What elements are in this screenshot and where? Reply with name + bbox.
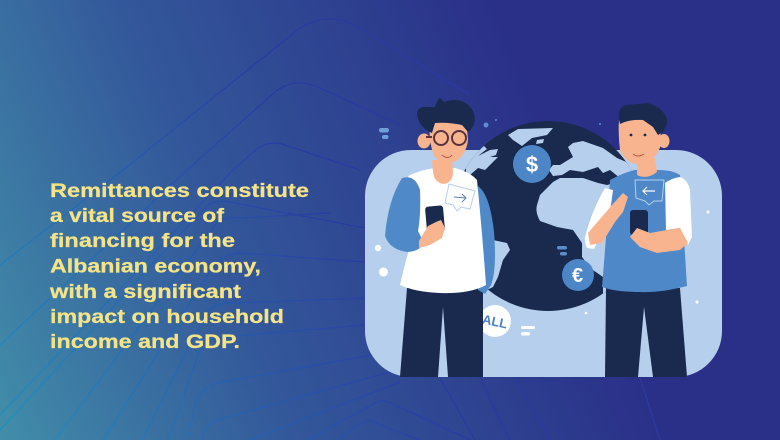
neck	[432, 160, 453, 184]
speech bubble with arrow	[445, 184, 475, 211]
smile	[633, 154, 644, 156]
headline text: a vital source of	[50, 205, 225, 227]
pointing arm	[588, 193, 628, 245]
blue vest	[602, 170, 687, 292]
phone	[630, 210, 648, 235]
headline text: financing for the	[50, 230, 235, 252]
illustration	[365, 98, 722, 377]
phone	[425, 205, 445, 233]
smile	[442, 155, 452, 158]
icon: dollar coin: $	[526, 152, 538, 177]
headline text: with a significant	[49, 281, 242, 303]
icon: ALL currency badge	[479, 305, 511, 337]
face	[619, 118, 661, 165]
right narrow sleeve	[478, 186, 495, 294]
icon: ALL currency badge: ALL	[481, 312, 509, 331]
right white sleeve	[665, 177, 692, 245]
holding arm	[630, 228, 688, 253]
globe	[464, 121, 632, 311]
ear	[658, 134, 670, 148]
headline text: Albanian economy,	[50, 256, 261, 278]
hair	[417, 98, 475, 133]
speech bubble with arrow	[635, 180, 664, 205]
small dots and bars	[375, 119, 710, 336]
headline text: Remittances constitute	[50, 180, 309, 202]
right person	[585, 103, 692, 377]
white vest	[400, 168, 486, 293]
light blue rounded panel	[365, 150, 722, 377]
hand and arm	[419, 220, 445, 248]
icon: euro coin: €	[572, 265, 583, 287]
pants	[605, 288, 687, 377]
icon: dollar coin	[513, 145, 551, 183]
ear	[418, 134, 430, 148]
left person	[385, 98, 495, 377]
headline text: income and GDP.	[50, 331, 240, 353]
glasses	[426, 131, 466, 145]
headline text: impact on household	[50, 306, 284, 328]
face	[430, 118, 468, 163]
left sleeve	[385, 177, 424, 252]
pants	[400, 288, 483, 377]
left white sleeve	[585, 188, 613, 249]
hair	[619, 103, 667, 135]
eyes	[630, 134, 632, 136]
icon: euro coin	[562, 259, 594, 291]
headline text	[49, 180, 309, 353]
neck	[637, 158, 657, 177]
